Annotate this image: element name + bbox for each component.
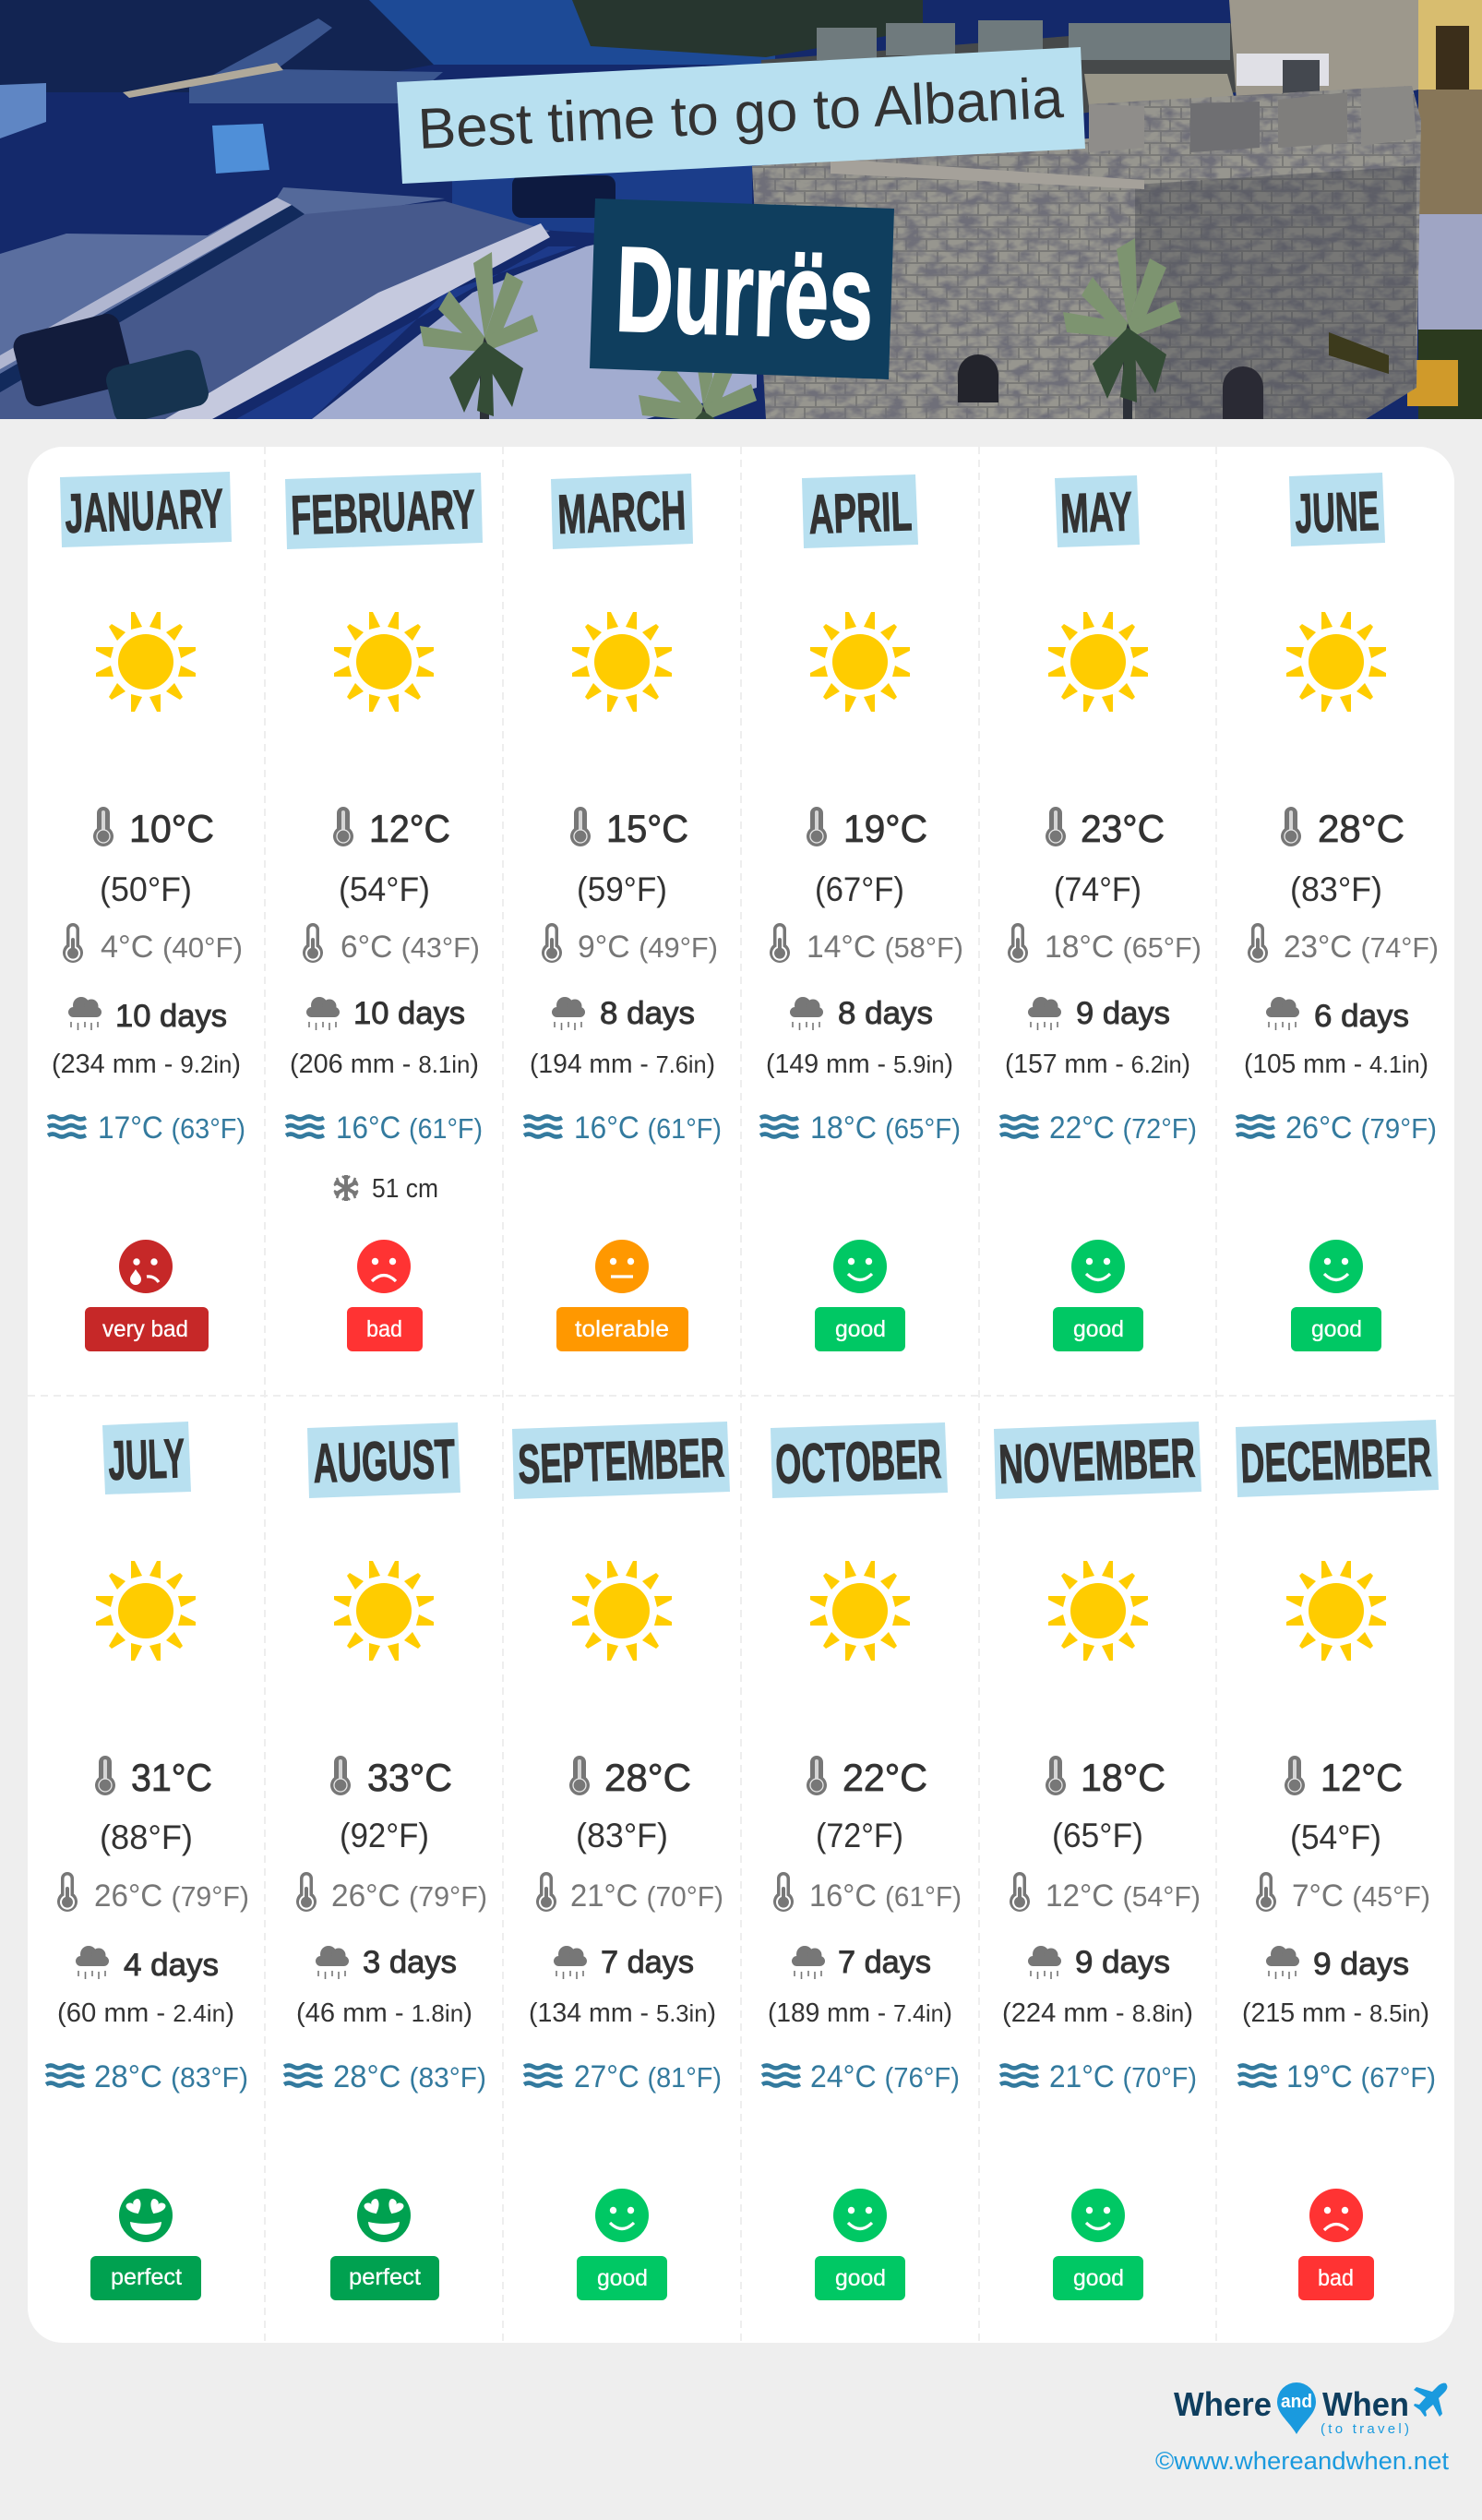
rainfall: 10 days — [353, 996, 465, 1031]
month label: July — [102, 1422, 191, 1494]
low temperature: 6°C (43°F) — [341, 930, 480, 965]
month label: February — [285, 473, 483, 549]
average temperature: 12°C — [369, 807, 450, 850]
city name banner — [590, 198, 894, 379]
panel: January — [48, 472, 245, 1351]
low temperature: 4°C (40°F) — [101, 930, 243, 965]
month label: January — [60, 472, 232, 547]
icon: sun — [810, 612, 910, 712]
rainfall: (105 mm - 4.1in) — [1244, 1050, 1428, 1079]
low temperature — [1008, 923, 1201, 965]
sea temperature: 21°C (70°F) — [1049, 2059, 1197, 2094]
far wall and merlons — [761, 24, 1237, 113]
rainfall: (149 mm - 5.9in) — [766, 1050, 953, 1079]
rating: perfect — [90, 2189, 201, 2300]
average temperature: (67°F) — [815, 870, 904, 908]
icon: sun — [572, 1561, 672, 1661]
rating: good: good — [1073, 2265, 1124, 2291]
rainfall: 3 days — [363, 1945, 457, 1980]
city name banner: Durrës — [614, 221, 876, 365]
rainfall: 7 days — [838, 1945, 931, 1980]
month label: November: NOVEMBER — [998, 1427, 1196, 1495]
rating: good — [1053, 2189, 1143, 2300]
rating: good — [577, 2189, 667, 2300]
low temperature: 23°C (74°F) — [1284, 930, 1439, 965]
rating: good — [815, 1240, 905, 1351]
rainfall — [529, 1945, 716, 2028]
sea temperature: 27°C (81°F) — [574, 2059, 722, 2094]
low temperature — [1010, 1872, 1201, 1914]
average temperature: 22°C — [843, 1756, 927, 1799]
month label: September: SEPTEMBER — [517, 1426, 725, 1495]
rainfall: 6 days — [1314, 999, 1409, 1034]
rainfall — [296, 1945, 472, 2028]
icon: sun — [1048, 612, 1148, 712]
average temperature — [569, 1756, 691, 1854]
rainfall — [766, 996, 953, 1079]
logo: Where and When (to travel): and — [1281, 2392, 1312, 2412]
rainfall — [290, 996, 479, 1079]
roads — [0, 198, 292, 374]
rainfall — [1242, 1946, 1429, 2028]
low temperature — [57, 1872, 249, 1914]
rainfall: 9 days — [1076, 996, 1170, 1031]
rainfall: (60 mm - 2.4in) — [57, 1998, 234, 2028]
palms — [420, 252, 538, 419]
cars — [13, 314, 129, 406]
month label: March — [551, 474, 693, 549]
month label: May — [1055, 475, 1140, 547]
low temperature — [303, 923, 480, 965]
month label: June: JUNE — [1294, 480, 1380, 545]
panel: December — [1236, 1420, 1439, 2300]
average temperature: (59°F) — [577, 870, 667, 908]
panel: February — [285, 473, 483, 1351]
title banner — [397, 47, 1085, 184]
rainfall: (157 mm - 6.2in) — [1005, 1050, 1190, 1079]
low temperature: 12°C (54°F) — [1046, 1878, 1201, 1914]
rating: good: good — [597, 2265, 648, 2291]
rainfall: 9 days — [1075, 1945, 1170, 1980]
tower windows and sign — [958, 354, 998, 402]
sea temperature: 19°C (67°F) — [1286, 2059, 1436, 2094]
rainfall: 4 days — [124, 1948, 219, 1983]
low temperature — [1256, 1872, 1430, 1914]
snowfall: 51 cm — [372, 1174, 438, 1204]
icon: sun — [96, 1561, 196, 1661]
rainfall: (46 mm - 1.8in) — [296, 1998, 472, 2028]
sea temperature: 24°C (76°F) — [810, 2059, 960, 2094]
average temperature: 28°C — [604, 1756, 691, 1799]
rainfall: 9 days — [1313, 1947, 1409, 1982]
month label: January: JANUARY — [64, 477, 224, 545]
low temperature: 26°C (79°F) — [331, 1878, 487, 1914]
average temperature — [1046, 1756, 1165, 1854]
month label: June — [1289, 473, 1385, 546]
rainfall: 8 days — [838, 996, 933, 1031]
icon: sun — [572, 612, 672, 712]
month label: July: JULY — [107, 1427, 185, 1492]
average temperature — [807, 1756, 927, 1854]
month label: October — [771, 1422, 948, 1498]
average temperature: (72°F) — [816, 1817, 903, 1854]
sea temperature: 26°C (79°F) — [1285, 1110, 1437, 1146]
average temperature — [570, 807, 688, 908]
rating: good — [815, 2189, 905, 2300]
average temperature: 23°C — [1081, 807, 1165, 850]
logo: Where and When (to travel) — [1174, 2382, 1447, 2437]
month label: September — [512, 1422, 730, 1499]
sea temperature: 22°C (72°F) — [1049, 1110, 1197, 1146]
sea temperature: 28°C (83°F) — [333, 2059, 486, 2094]
logo: Where and When (to travel): (to travel) — [1321, 2421, 1409, 2437]
sea temperature: 28°C (83°F) — [94, 2059, 248, 2094]
average temperature: 28°C — [1318, 807, 1404, 850]
average temperature — [330, 1756, 452, 1854]
sea temperature: 18°C (65°F) — [810, 1110, 961, 1146]
average temperature — [1281, 807, 1404, 908]
average temperature — [1046, 807, 1165, 908]
low temperature: 16°C (61°F) — [809, 1878, 962, 1914]
low temperature: 9°C (49°F) — [578, 930, 718, 965]
average temperature: 12°C — [1321, 1756, 1403, 1799]
sea temperature: 17°C (63°F) — [98, 1110, 245, 1146]
rainfall: 7 days — [601, 1945, 694, 1980]
month label: May: MAY — [1059, 480, 1133, 545]
rating: tolerable: tolerable — [575, 1316, 669, 1342]
rating: bad: bad — [366, 1316, 402, 1342]
average temperature — [93, 807, 214, 908]
rainfall: 8 days — [600, 996, 695, 1031]
rating: bad — [1298, 2189, 1374, 2300]
average temperature: 33°C — [367, 1756, 452, 1799]
month label: October: OCTOBER — [774, 1428, 942, 1495]
month label: April — [802, 474, 918, 548]
rating: good: good — [835, 1316, 886, 1342]
copyright line: ©www.whereandwhen.net — [1155, 2447, 1449, 2475]
rating: tolerable — [556, 1240, 688, 1351]
snowfall — [334, 1174, 438, 1204]
panel: October — [762, 1422, 962, 2300]
title banner: Best time to go to Albania — [416, 66, 1065, 162]
panel: June — [1237, 473, 1439, 1351]
rainfall — [530, 996, 715, 1079]
rating: good — [1291, 1240, 1381, 1351]
month label: August — [307, 1422, 460, 1498]
low temperature — [63, 923, 243, 965]
rainfall: (224 mm - 8.8in) — [1002, 1998, 1193, 2028]
month label: April: APRIL — [807, 480, 913, 546]
average temperature: (83°F) — [1290, 870, 1382, 908]
panel: May — [1000, 475, 1201, 1351]
rating: good: good — [1311, 1316, 1362, 1342]
panel: September — [512, 1422, 730, 2300]
average temperature: (54°F) — [339, 870, 430, 908]
rainfall: (215 mm - 8.5in) — [1242, 1998, 1429, 2028]
average temperature: 10°C — [129, 807, 214, 850]
hero photo: Durrës tower and road — [0, 0, 1482, 419]
panel: monthly weather grid — [28, 447, 1454, 2343]
sea temperature: 16°C (61°F) — [574, 1110, 722, 1146]
icon: sun — [334, 612, 434, 712]
month label: March: MARCH — [556, 479, 687, 546]
rating: good — [1053, 1240, 1143, 1351]
average temperature: (65°F) — [1052, 1817, 1143, 1854]
tower body — [752, 86, 1421, 419]
rating: very bad: very bad — [102, 1316, 188, 1342]
month label: August: AUGUST — [312, 1428, 456, 1494]
panel: November — [994, 1422, 1201, 2300]
low temperature: 7°C (45°F) — [1292, 1878, 1430, 1914]
right-hand strip — [1418, 0, 1482, 90]
average temperature: 19°C — [843, 807, 927, 850]
icon: sun — [810, 1561, 910, 1661]
rainfall: (234 mm - 9.2in) — [52, 1050, 241, 1079]
low temperature: 14°C (58°F) — [807, 930, 963, 965]
logo: Where and When (to travel): When — [1322, 2385, 1409, 2423]
low temperature: 18°C (65°F) — [1045, 930, 1201, 965]
average temperature: (83°F) — [576, 1817, 668, 1854]
average temperature: 31°C — [131, 1756, 212, 1799]
rainfall: (206 mm - 8.1in) — [290, 1050, 479, 1079]
month label: November — [994, 1422, 1201, 1499]
average temperature: 15°C — [606, 807, 688, 850]
white building — [1229, 0, 1418, 106]
rainfall — [768, 1945, 952, 2028]
low temperature — [773, 1872, 962, 1914]
logo: Where and When (to travel): Where — [1174, 2385, 1272, 2423]
average temperature: (54°F) — [1290, 1818, 1381, 1856]
month label: February: FEBRUARY — [290, 478, 476, 546]
rainfall — [52, 997, 241, 1079]
panel: April — [760, 474, 963, 1351]
rating: perfect: perfect — [349, 2264, 421, 2290]
rainfall: (194 mm - 7.6in) — [530, 1050, 715, 1079]
rating: perfect — [330, 2189, 439, 2300]
low temperature: 26°C (79°F) — [94, 1878, 249, 1914]
rainfall: (189 mm - 7.4in) — [768, 1998, 952, 2028]
rainfall — [1244, 997, 1428, 1079]
icon: sun — [1286, 1561, 1386, 1661]
average temperature — [333, 807, 450, 908]
average temperature: (88°F) — [100, 1818, 193, 1856]
low temperature: 21°C (70°F) — [570, 1878, 723, 1914]
average temperature: (92°F) — [340, 1817, 429, 1854]
rainfall: (134 mm - 5.3in) — [529, 1998, 716, 2028]
rainfall — [1002, 1945, 1193, 2028]
rainfall — [1005, 996, 1190, 1079]
rating: good: good — [835, 2265, 886, 2291]
average temperature — [1285, 1756, 1403, 1856]
average temperature: (74°F) — [1054, 870, 1141, 908]
rainfall: 10 days — [115, 999, 227, 1034]
average temperature — [807, 807, 927, 908]
low temperature — [296, 1872, 487, 1914]
average temperature: 18°C — [1081, 1756, 1165, 1799]
rating: good: good — [1073, 1316, 1124, 1342]
average temperature — [95, 1756, 212, 1856]
rating: perfect: perfect — [111, 2264, 182, 2290]
rating: bad: bad — [1318, 2265, 1354, 2291]
rating: bad — [347, 1240, 423, 1351]
low temperature — [770, 923, 963, 965]
panel: March — [524, 474, 722, 1351]
low temperature — [1248, 923, 1439, 965]
icon: sun — [96, 612, 196, 712]
rainfall — [57, 1946, 234, 2028]
panel: August — [284, 1422, 487, 2300]
icon: sun — [1286, 612, 1386, 712]
rating: very bad — [85, 1240, 209, 1351]
sea temperature: 16°C (61°F) — [336, 1110, 483, 1146]
icon: sun — [334, 1561, 434, 1661]
low temperature — [542, 923, 718, 965]
low temperature — [536, 1872, 723, 1914]
icon: sun — [1048, 1561, 1148, 1661]
average temperature: (50°F) — [100, 870, 192, 908]
panel: July — [46, 1422, 249, 2300]
